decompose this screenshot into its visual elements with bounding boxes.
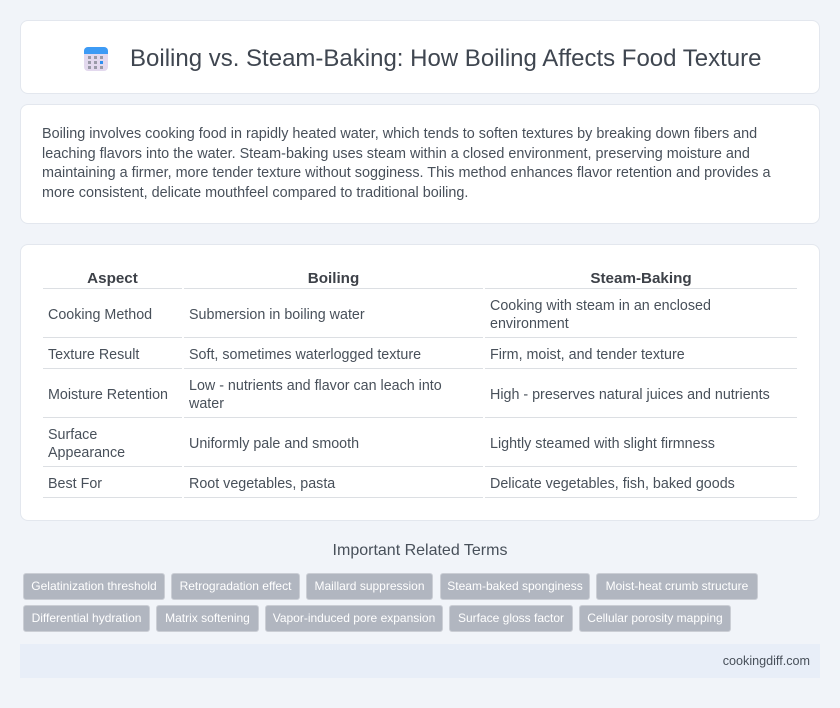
footer source: cookingdiff.com: [723, 654, 810, 668]
heading: Boiling vs. Steam-Baking: How Boiling Affects Food Texture: [130, 45, 761, 72]
related terms tags: [23, 573, 758, 632]
tag: [156, 605, 259, 632]
table header: Steam-Baking: [590, 270, 692, 287]
row: surface appearance: Appearance: [48, 445, 125, 461]
footer bar: [20, 644, 820, 678]
intro paragraph: maintaining a firmer, more tender texture without sogginess. This method enhances flavor retention and provides a: [42, 165, 770, 181]
row: cooking method: Cooking Method: [48, 307, 152, 323]
tag: [306, 573, 433, 600]
tag: Differential hydration: [32, 611, 141, 625]
tag: Vapor-induced pore expansion: [273, 611, 435, 625]
table header: Aspect: [87, 270, 138, 287]
row: best for: [48, 476, 735, 492]
intro paragraph: leaching flavors into the water. Steam-baking uses steam within a closed environment, preserving moisture and: [42, 146, 750, 162]
tag: Cellular porosity mapping: [587, 611, 723, 625]
intro paragraph: Boiling involves cooking food in rapidly heated water, which tends to soften textures by breaking down fibers and: [42, 126, 757, 142]
table header: [87, 270, 692, 287]
comparison table panel: [20, 244, 820, 521]
tag: Maillard suppression: [314, 579, 425, 593]
tag: Matrix softening: [165, 611, 250, 625]
tag: Retrogradation effect: [180, 579, 291, 593]
tag: [23, 573, 165, 600]
row: cooking method: [48, 298, 711, 332]
tag: Gelatinization threshold: [31, 579, 157, 593]
tag: [265, 605, 443, 632]
row: best for: Delicate vegetables, fish, baked goods: [490, 476, 735, 492]
row: surface appearance: Uniformly pale and smooth: [189, 436, 359, 452]
row: texture result: [48, 347, 685, 363]
row: cooking method: environment: [490, 316, 569, 332]
row: best for: Best For: [48, 476, 102, 492]
title card: [20, 20, 820, 94]
row: moisture retention: High - preserves natural juices and nutrients: [490, 387, 770, 403]
intro paragraph: [42, 126, 770, 201]
row: best for: Root vegetables, pasta: [189, 476, 335, 492]
row: texture result: Texture Result: [48, 347, 139, 363]
tag: Steam-baked sponginess: [447, 579, 583, 593]
tag: [171, 573, 300, 600]
icon: calendar: [84, 47, 108, 71]
related terms heading: Important Related Terms: [333, 542, 507, 559]
row: surface appearance: [48, 427, 715, 461]
row: surface appearance: Lightly steamed with slight firmness: [490, 436, 715, 452]
row: moisture retention: Moisture Retention: [48, 387, 168, 403]
row: moisture retention: water: [189, 396, 224, 412]
tag: Moist-heat crumb structure: [606, 579, 748, 593]
tag: [449, 605, 573, 632]
row: moisture retention: [48, 378, 770, 412]
row: cooking method: Submersion in boiling water: [189, 307, 365, 323]
row: surface appearance: Surface: [48, 427, 97, 443]
row: moisture retention: Low - nutrients and flavor can leach into: [189, 378, 442, 394]
tag: [23, 605, 150, 632]
row: texture result: Firm, moist, and tender texture: [490, 347, 685, 363]
tag: [596, 573, 758, 600]
intro paragraph: more consistent, delicate mouthfeel compared to traditional boiling.: [42, 185, 468, 201]
table header: Boiling: [308, 270, 359, 287]
tag: Surface gloss factor: [458, 611, 564, 625]
intro text panel: [20, 104, 820, 224]
row: texture result: Soft, sometimes waterlogged texture: [189, 347, 421, 363]
row: cooking method: Cooking with steam in an enclosed: [490, 298, 711, 314]
tag: [440, 573, 590, 600]
tag: [579, 605, 731, 632]
